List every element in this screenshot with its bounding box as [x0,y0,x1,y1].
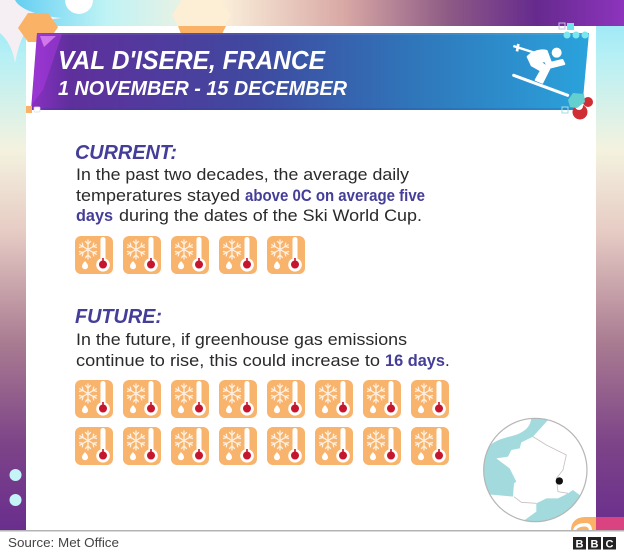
icons: sixteen days [75,380,449,465]
left dots [10,469,22,506]
text block: future: 16 days [385,351,445,370]
footer rule [0,530,624,532]
text block: current: days [76,206,113,225]
text block: current: temperatures stayed [76,186,240,205]
text block: future [76,330,450,370]
sea: Mediterranean [524,490,580,521]
footer bar [0,532,624,554]
orange hexagons [18,13,226,42]
banner heading: VAL D'ISERE, FRANCE [58,45,326,75]
map of France [483,418,588,522]
BBC logo: C [606,538,614,550]
section: current [75,141,425,274]
BBC logo [573,537,616,550]
section: future [75,305,450,465]
text block: current: during the dates of the Ski World Cup. [119,206,422,225]
icons: five days [75,236,305,274]
decorative top-left shapes [0,0,231,63]
text block: future: . [445,351,450,370]
text block: current: above 0C on average five [245,186,425,205]
text block: current [76,165,425,225]
text block: future: continue to rise, this could increase to [76,351,380,370]
heading: future: FUTURE: [75,305,162,328]
text block: current: In the past two decades, the average daily [76,165,410,184]
accent hexagons [26,23,593,120]
sea: Atlantic and Channel [484,418,548,497]
BBC logo: B [576,538,584,550]
location marker [556,477,563,485]
source: Source: Met Office [8,535,119,550]
bottom-right corner shapes [571,517,624,530]
title banner [26,23,593,120]
heading: current: CURRENT: [75,141,177,164]
icon: skier [513,44,568,95]
banner dates: 1 NOVEMBER - 15 DECEMBER [58,77,347,100]
BBC logo: B [591,538,599,550]
text block: future: In the future, if greenhouse gas emissions [76,330,407,349]
